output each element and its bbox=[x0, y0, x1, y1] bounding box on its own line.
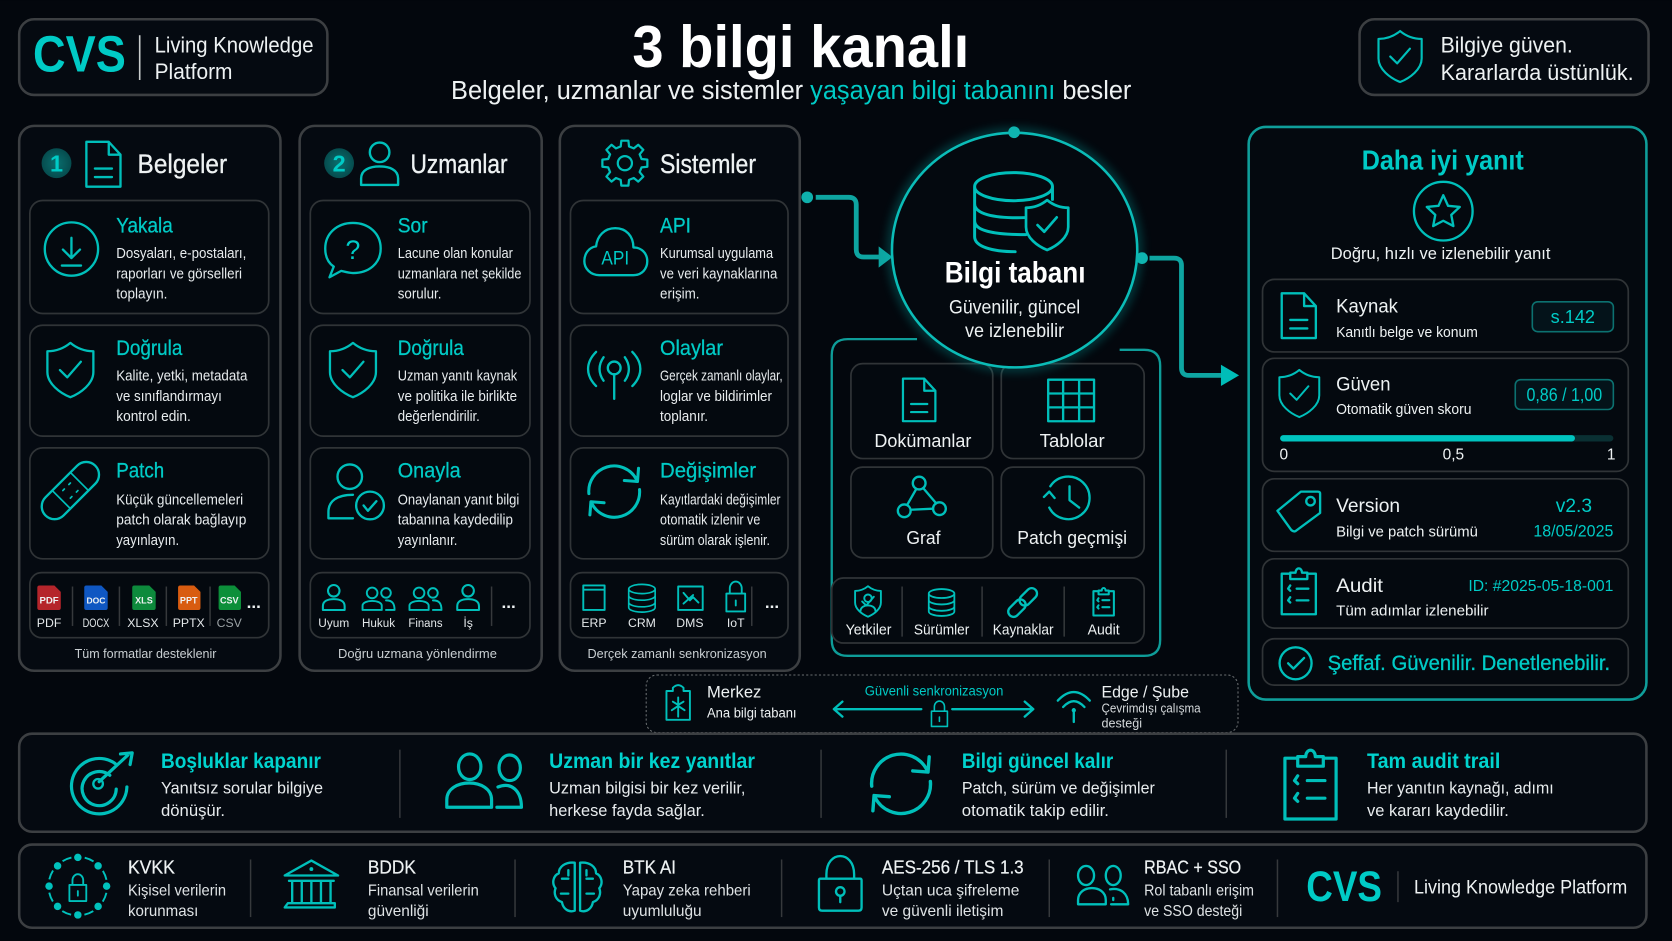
heading: Uzmanlar: 2 bbox=[333, 151, 346, 177]
card: Audit bbox=[1263, 559, 1628, 628]
footer logo: Living Knowledge Platform bbox=[1414, 878, 1627, 899]
panel: Belgeler bbox=[19, 126, 280, 671]
RBAC + SSO: Rol tabanlı erişim bbox=[1144, 883, 1254, 900]
strip: Yetkiler Sürümler Kaynaklar Audit: Yetkiler bbox=[846, 622, 891, 639]
card: Version: Bilgi ve patch sürümü bbox=[1336, 523, 1478, 540]
KVKK: Kişisel verilerin bbox=[128, 883, 226, 900]
KVKK: korunması bbox=[128, 903, 198, 920]
file formats strip: PPTX bbox=[173, 616, 205, 630]
card: Doğrula: Doğrula bbox=[398, 336, 464, 360]
card: Yakala: toplayın. bbox=[116, 287, 167, 303]
card: Patch bbox=[30, 448, 269, 559]
experts strip: ... bbox=[502, 593, 516, 612]
tile: Graf: Graf bbox=[906, 527, 941, 548]
compliance band bbox=[19, 845, 1646, 928]
knowledge base hub: ve izlenebilir bbox=[965, 321, 1065, 342]
card: Kaynak: s.142 bbox=[1551, 307, 1595, 327]
tile: Tablolar bbox=[1001, 364, 1144, 459]
experts strip: Finans bbox=[408, 616, 443, 630]
card: Doğrula: kontrol edin. bbox=[116, 409, 191, 425]
title: 3 bilgi kanalı bbox=[632, 13, 969, 80]
card: Değişimler: Kayıtlardaki değişimler bbox=[660, 492, 781, 508]
card: Doğrula: Kalite, yetki, metadata bbox=[116, 369, 247, 385]
BTK AI bbox=[553, 856, 751, 920]
card: Onayla: yayınlanır. bbox=[398, 533, 457, 549]
heading: Belgeler: Belgeler bbox=[138, 149, 227, 179]
experts strip: İş bbox=[463, 616, 473, 630]
BTK AI: uyumluluğu bbox=[623, 903, 702, 920]
card: Version bbox=[1263, 479, 1628, 551]
card: Güven: 0,5 bbox=[1443, 447, 1464, 464]
card: Audit: Audit bbox=[1336, 576, 1384, 597]
BTK AI: BTK AI bbox=[623, 856, 676, 877]
benefit: Boşluklar kapanır bbox=[71, 749, 323, 820]
card: Değişimler: otomatik izlenir ve bbox=[660, 513, 760, 529]
systems strip: ... bbox=[765, 593, 779, 612]
AES-256 / TLS 1.3 bbox=[819, 856, 1024, 920]
heading: Belgeler: 1 bbox=[50, 151, 63, 177]
file formats strip bbox=[30, 573, 269, 638]
caption: experts: Doğru uzmana yönlendirme bbox=[338, 646, 497, 661]
benefit: Uzman bir kez yanıtlar: Uzman bilgisi bir kez verilir, bbox=[549, 778, 745, 797]
systems strip: IoT bbox=[727, 616, 745, 630]
tile: Dokümanlar bbox=[851, 364, 993, 459]
BDDK: Finansal verilerin bbox=[368, 883, 479, 900]
arrow: inputs to knowledge base bbox=[801, 191, 893, 268]
heading: Sistemler: Sistemler bbox=[660, 149, 756, 179]
benefit: Boşluklar kapanır: Yanıtsız sorular bilgiye bbox=[161, 778, 323, 797]
file formats strip: CSV bbox=[217, 616, 243, 630]
card: Değişimler: Değişimler bbox=[660, 459, 756, 483]
card: Patch: Küçük güncellemeleri bbox=[116, 492, 243, 508]
card: Güven: 1 bbox=[1607, 447, 1616, 464]
systems strip bbox=[570, 573, 788, 638]
card: Güven bbox=[1263, 358, 1628, 471]
card: Değişimler bbox=[570, 448, 788, 559]
knowledge base hub: Güvenilir, güncel bbox=[949, 298, 1080, 319]
card: Audit: ID: #2025-05-18-001 bbox=[1468, 578, 1613, 595]
file formats strip: DOC bbox=[87, 596, 105, 606]
benefit: Uzman bir kez yanıtlar: herkese fayda sağlar. bbox=[549, 801, 705, 820]
card: Güven: 0,86 / 1,00 bbox=[1526, 385, 1602, 405]
systems strip: CRM bbox=[628, 616, 656, 630]
benefit: Bilgi güncel kalır: Bilgi güncel kalır bbox=[962, 749, 1113, 773]
KVKK bbox=[45, 854, 226, 920]
arrow: knowledge base to better answer bbox=[1136, 252, 1239, 386]
card: API: ve veri kaynaklarına bbox=[660, 266, 777, 282]
file formats strip: CSV bbox=[220, 596, 239, 606]
benefit: Bilgi güncel kalır: Patch, sürüm ve değişimler bbox=[962, 778, 1155, 797]
card: Onayla: tabanına kaydedilip bbox=[398, 513, 513, 529]
transparency callout: Şeffaf. Güvenilir. Denetlenebilir. bbox=[1328, 651, 1610, 675]
card: Sor: Sor bbox=[398, 213, 428, 237]
card: Audit: Tüm adımlar izlenebilir bbox=[1336, 602, 1489, 619]
AES-256 / TLS 1.3: AES-256 / TLS 1.3 bbox=[882, 856, 1024, 877]
card: Sor: uzmanlara net şekilde bbox=[398, 266, 521, 282]
card: Yakala: Dosyaları, e-postaları, bbox=[116, 246, 246, 262]
trust panel: Kararlarda üstünlük. bbox=[1441, 60, 1634, 85]
card: Doğrula bbox=[30, 325, 269, 436]
secure sync bar: Merkez bbox=[707, 682, 761, 701]
strip: Yetkiler Sürümler Kaynaklar Audit: Audit bbox=[1088, 622, 1120, 639]
footer logo bbox=[1306, 863, 1627, 911]
card: Version: v2.3 bbox=[1556, 496, 1592, 517]
secure sync bar: Güvenli senkronizasyon bbox=[865, 682, 1003, 698]
knowledge contents frame bbox=[832, 339, 1160, 656]
icon: database with shield bbox=[975, 173, 1068, 252]
logo panel: Living Knowledge bbox=[155, 32, 314, 57]
panel: Sistemler bbox=[560, 126, 800, 671]
card: Version: 18/05/2025 bbox=[1533, 521, 1613, 540]
card: Olaylar bbox=[570, 325, 788, 436]
card: Yakala: Yakala bbox=[116, 213, 173, 237]
logo panel: Platform bbox=[155, 59, 232, 84]
card: Sor: Lacune olan konular bbox=[398, 246, 513, 262]
benefit: Uzman bir kez yanıtlar: Uzman bir kez yanıtlar bbox=[549, 749, 755, 773]
experts strip bbox=[310, 573, 530, 638]
RBAC + SSO: RBAC + SSO bbox=[1144, 856, 1241, 877]
subtitle: Belgeler, uzmanlar ve sistemler yaşayan bilgi tabanını besler bbox=[451, 77, 1132, 105]
card: Patch: Patch bbox=[116, 459, 164, 483]
card: API bbox=[570, 201, 788, 314]
BDDK: güvenliği bbox=[368, 903, 429, 920]
secure sync bar: Edge / Şube bbox=[1102, 682, 1189, 701]
file formats strip: ... bbox=[247, 593, 261, 612]
card: Onayla: Onaylanan yanıt bilgi bbox=[398, 492, 519, 508]
panel: Uzmanlar bbox=[300, 126, 542, 671]
caption: formats: Tüm formatlar desteklenir bbox=[75, 646, 217, 661]
file formats strip: DOCX bbox=[83, 616, 109, 630]
heading: Uzmanlar bbox=[324, 143, 508, 185]
strip: Yetkiler Sürümler Kaynaklar Audit: Sürümler bbox=[914, 622, 969, 639]
card: Güven: Otomatik güven skoru bbox=[1336, 401, 1472, 418]
card: Olaylar: Olaylar bbox=[660, 336, 723, 360]
file formats strip: XLSX bbox=[127, 616, 159, 630]
card: Yakala: raporları ve görselleri bbox=[116, 266, 242, 282]
benefits band bbox=[19, 734, 1646, 832]
card: API: Kurumsal uygulama bbox=[660, 246, 773, 262]
card: Doğrula: değerlendirilir. bbox=[398, 409, 480, 425]
benefit: Tam audit trail: Her yanıtın kaynağı, adımı bbox=[1367, 778, 1554, 797]
card: Sor: sorulur. bbox=[398, 287, 441, 303]
card: Kaynak bbox=[1263, 279, 1628, 352]
secure sync bar: desteği bbox=[1102, 715, 1142, 730]
heading: Uzmanlar: Uzmanlar bbox=[411, 149, 508, 179]
panel: Daha iyi yanıt bbox=[1249, 127, 1646, 700]
heading: Sistemler bbox=[602, 141, 756, 186]
card: Olaylar: toplanır. bbox=[660, 409, 708, 425]
card: Version: Version bbox=[1336, 496, 1400, 517]
card: Doğrula bbox=[310, 325, 530, 436]
BDDK: BDDK bbox=[368, 856, 416, 877]
strip: Yetkiler Sürümler Kaynaklar Audit bbox=[832, 578, 1144, 643]
card: Doğrula: Doğrula bbox=[116, 336, 182, 360]
footer logo: CVS bbox=[1306, 863, 1382, 911]
card: Doğrula: ve sınıflandırmayı bbox=[116, 389, 222, 405]
systems strip: DMS bbox=[676, 616, 704, 630]
benefit: Uzman bir kez yanıtlar bbox=[447, 749, 755, 820]
card: API: erişim. bbox=[660, 287, 700, 303]
card: Doğrula: ve politika ile birlikte bbox=[398, 389, 517, 405]
tile: Patch geçmişi bbox=[1001, 467, 1144, 558]
benefit: Bilgi güncel kalır: otomatik takip edilir. bbox=[962, 801, 1109, 820]
logo panel bbox=[19, 19, 327, 95]
card: API: API bbox=[660, 213, 691, 237]
RBAC + SSO: ve SSO desteği bbox=[1144, 903, 1242, 920]
card: Onayla: Onayla bbox=[398, 459, 461, 483]
panel: Daha iyi yanıt: Doğru, hızlı ve izlenebilir yanıt bbox=[1331, 244, 1551, 263]
card: Değişimler: sürüm olarak işlenir. bbox=[660, 533, 770, 549]
card: Sor bbox=[310, 201, 530, 314]
file formats strip: PDF bbox=[39, 596, 59, 607]
strip: Yetkiler Sürümler Kaynaklar Audit: Kaynaklar bbox=[993, 622, 1054, 639]
knowledge base hub: Bilgi tabanı bbox=[945, 257, 1086, 290]
heading: Belgeler bbox=[42, 142, 227, 187]
panel: Daha iyi yanıt: Daha iyi yanıt bbox=[1362, 145, 1524, 176]
benefit: Tam audit trail: Tam audit trail bbox=[1367, 749, 1500, 773]
benefit: Boşluklar kapanır: Boşluklar kapanır bbox=[161, 749, 321, 773]
secure sync bar: Çevrimdışı çalışma bbox=[1102, 700, 1201, 715]
secure sync bar bbox=[646, 675, 1238, 733]
card: Güven: 0 bbox=[1280, 447, 1288, 464]
tile: Graf bbox=[851, 467, 993, 558]
benefit: Bilgi güncel kalır bbox=[872, 749, 1155, 820]
icon: star bbox=[1414, 182, 1473, 240]
RBAC + SSO bbox=[1078, 856, 1254, 920]
file formats strip: PPT bbox=[180, 596, 198, 606]
benefit: Tam audit trail bbox=[1285, 749, 1554, 820]
card: Olaylar: loglar ve bildirimler bbox=[660, 389, 772, 405]
systems strip: ERP bbox=[581, 616, 607, 630]
card: Yakala bbox=[30, 201, 269, 314]
benefit: Boşluklar kapanır: dönüşür. bbox=[161, 801, 225, 820]
experts strip: Hukuk bbox=[362, 616, 396, 630]
BDDK bbox=[285, 856, 479, 920]
card: Doğrula: Uzman yanıtı kaynak bbox=[398, 369, 518, 385]
card: Güven: Güven bbox=[1336, 374, 1390, 395]
transparency callout bbox=[1263, 639, 1628, 685]
card: Kaynak: Kanıtlı belge ve konum bbox=[1336, 324, 1478, 341]
caption: systems: Derçek zamanlı senkronizasyon bbox=[588, 646, 767, 661]
file formats strip: PDF bbox=[37, 616, 61, 630]
AES-256 / TLS 1.3: Uçtan uca şifreleme bbox=[882, 883, 1019, 900]
KVKK: KVKK bbox=[128, 856, 175, 877]
card: Patch: yayınlayın. bbox=[116, 533, 179, 549]
tile: Tablolar: Tablolar bbox=[1040, 430, 1105, 451]
BTK AI: Yapay zeka rehberi bbox=[623, 883, 751, 900]
card: Patch: patch olarak bağlayıp bbox=[116, 513, 246, 529]
card: Sor: ? bbox=[346, 235, 360, 265]
knowledge base hub bbox=[892, 126, 1137, 367]
secure sync bar: Ana bilgi tabanı bbox=[707, 705, 797, 721]
experts strip: Uyum bbox=[318, 616, 349, 630]
logo panel: CVS bbox=[33, 25, 126, 82]
card: Onayla bbox=[310, 448, 530, 559]
AES-256 / TLS 1.3: ve güvenli iletişim bbox=[882, 903, 1003, 920]
tile: Dokümanlar: Dokümanlar bbox=[874, 430, 971, 451]
file formats strip: XLS bbox=[135, 596, 153, 606]
tile: Patch geçmişi: Patch geçmişi bbox=[1017, 527, 1127, 548]
card: Kaynak: Kaynak bbox=[1336, 296, 1398, 317]
trust panel: Bilgiye güven. bbox=[1441, 32, 1573, 57]
card: API: API bbox=[601, 248, 629, 269]
card: Olaylar: Gerçek zamanlı olaylar, bbox=[660, 369, 783, 385]
benefit: Tam audit trail: ve kararı kaydedilir. bbox=[1367, 801, 1509, 820]
trust panel bbox=[1360, 19, 1649, 95]
